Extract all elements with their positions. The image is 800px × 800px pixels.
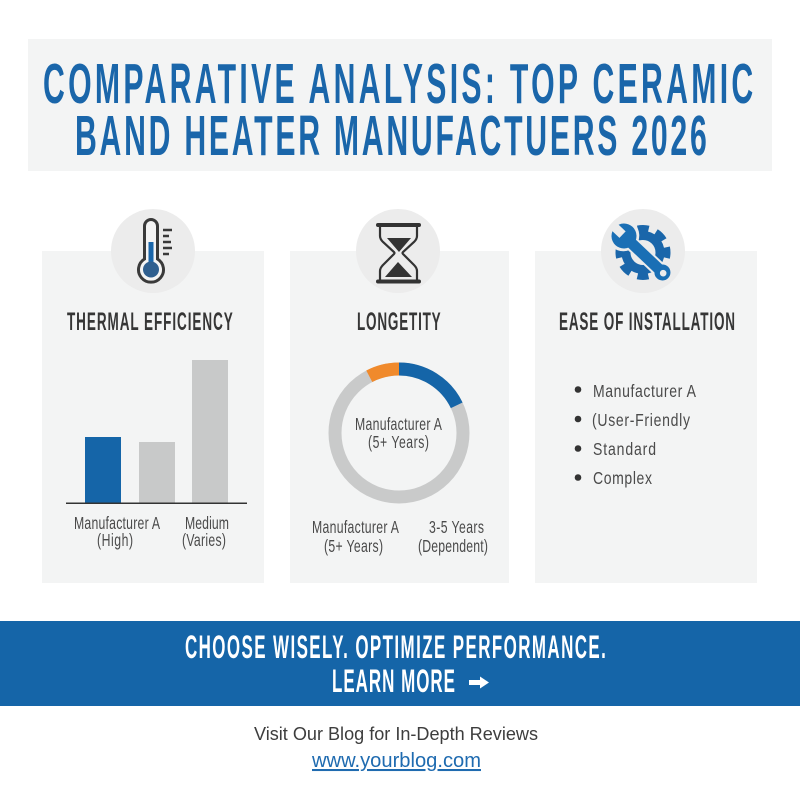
title	[28, 39, 772, 171]
icon: arrow	[469, 676, 489, 688]
call to action banner	[0, 621, 800, 706]
donut chart	[335, 369, 463, 497]
bar labels: Manufacturer A	[74, 514, 161, 534]
icon: gear and wrench	[601, 209, 685, 293]
bar labels: (Varies)	[182, 531, 226, 551]
donut labels	[312, 518, 488, 557]
bar labels: Medium	[185, 514, 229, 534]
bar chart	[66, 360, 247, 504]
title: BAND HEATER MANUFACTUERS 2026	[75, 104, 707, 167]
panel: ease of installation	[535, 209, 757, 583]
bar labels	[74, 514, 229, 551]
bullet list	[575, 381, 696, 488]
footer text: Visit Our Blog for In-Depth Reviews	[254, 723, 538, 744]
title: COMPARATIVE ANALYSIS: TOP CERAMIC	[43, 52, 753, 115]
call to action banner: LEARN MORE	[332, 665, 455, 699]
icon: thermometer	[111, 209, 195, 293]
donut labels: (5+ Years)	[324, 537, 383, 557]
heading: ease of installation: EASE OF INSTALLATION	[559, 309, 735, 336]
panel: longevity	[290, 209, 509, 583]
bar labels: (High)	[97, 531, 133, 551]
bullet list: (User-Friendly	[592, 410, 691, 430]
donut labels: Manufacturer A	[312, 518, 400, 538]
donut labels: (Dependent)	[418, 537, 488, 557]
icon: hourglass	[356, 209, 440, 293]
bullet list: Standard	[593, 439, 656, 459]
donut chart: (5+ Years)	[368, 433, 429, 453]
footer text	[254, 723, 538, 772]
donut chart: Manufacturer A	[355, 415, 443, 435]
bullet list: Manufacturer A	[593, 381, 696, 401]
heading: longetity: LONGETITY	[357, 309, 441, 336]
heading: thermal efficiency: THERMAL EFFICIENCY	[67, 309, 233, 336]
footer text: www.yourblog.com	[311, 749, 481, 772]
call to action banner: CHOOSE WISELY. OPTIMIZE PERFORMANCE.	[185, 631, 606, 665]
bullet list: Complex	[593, 468, 652, 488]
panel: thermal efficiency	[42, 209, 264, 583]
donut labels: 3-5 Years	[429, 518, 484, 538]
